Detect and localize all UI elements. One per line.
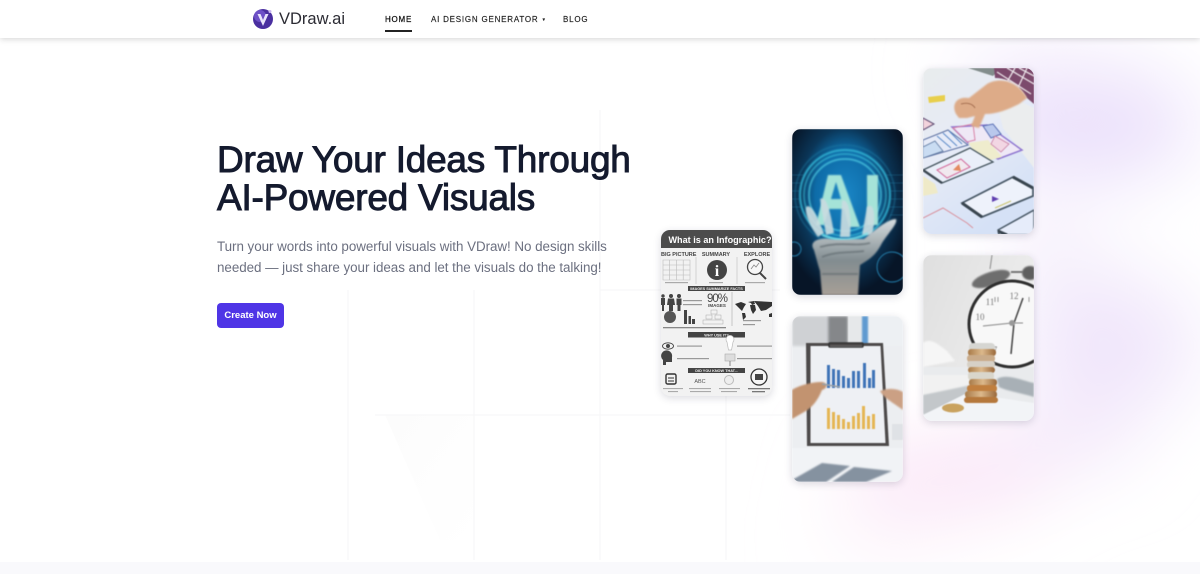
card: infographic preview — [661, 230, 772, 396]
card: infographic preview: DID YOU KNOW THAT... — [695, 369, 738, 373]
nav item: home — [385, 14, 412, 32]
card: infographic preview: EXPLORE — [744, 252, 770, 258]
people — [661, 294, 682, 311]
card: wireframe sketches photo — [923, 68, 1034, 234]
button: create now — [217, 303, 284, 328]
hero heading — [216, 139, 631, 218]
card: infographic preview: What is an Infographic? — [668, 235, 772, 245]
hero heading: AI-Powered Visuals — [217, 177, 535, 218]
card: AI hand photo — [792, 129, 903, 295]
nav item: home: HOME — [385, 15, 412, 24]
card: infographic preview: IMAGES SUMMARIZE FACTS — [690, 287, 743, 291]
logo wordmark: VDraw.ai — [279, 10, 345, 28]
logo icon — [253, 9, 273, 29]
card: infographic preview: SUMMARY — [702, 252, 730, 258]
bottom strip — [0, 562, 1200, 574]
card: infographic preview: WHY USE IT? — [704, 333, 729, 337]
navigation bar — [0, 0, 1200, 38]
card: chart on clipboard photo — [792, 316, 903, 482]
hero description: needed — just share your ideas and let the visuals do the talking! — [217, 260, 601, 274]
card: clock and coins photo: 12 — [1010, 291, 1018, 301]
card: clock and coins photo — [923, 255, 1034, 421]
hero description — [217, 239, 607, 275]
card: infographic preview: i — [715, 263, 720, 280]
card: infographic preview: 90% — [707, 293, 728, 305]
card: clock and coins photo: 10 — [976, 312, 985, 322]
hero description: Turn your words into powerful visuals with VDraw! No design skills — [217, 239, 607, 254]
card: clock and coins photo: 11 — [986, 297, 994, 307]
button: create now: Create Now — [224, 310, 277, 321]
card: clock and coins photo: 7 — [993, 345, 998, 355]
card: infographic preview: BIG PICTURE — [661, 252, 697, 258]
nav item: blog: BLOG — [563, 15, 588, 24]
card: infographic preview: ABC — [694, 379, 706, 385]
nav item: AI design generator: AI DESIGN GENERATOR ▾ — [431, 15, 545, 24]
card: infographic preview: IMAGES — [708, 303, 726, 308]
hero heading: Draw Your Ideas Through — [217, 139, 631, 180]
